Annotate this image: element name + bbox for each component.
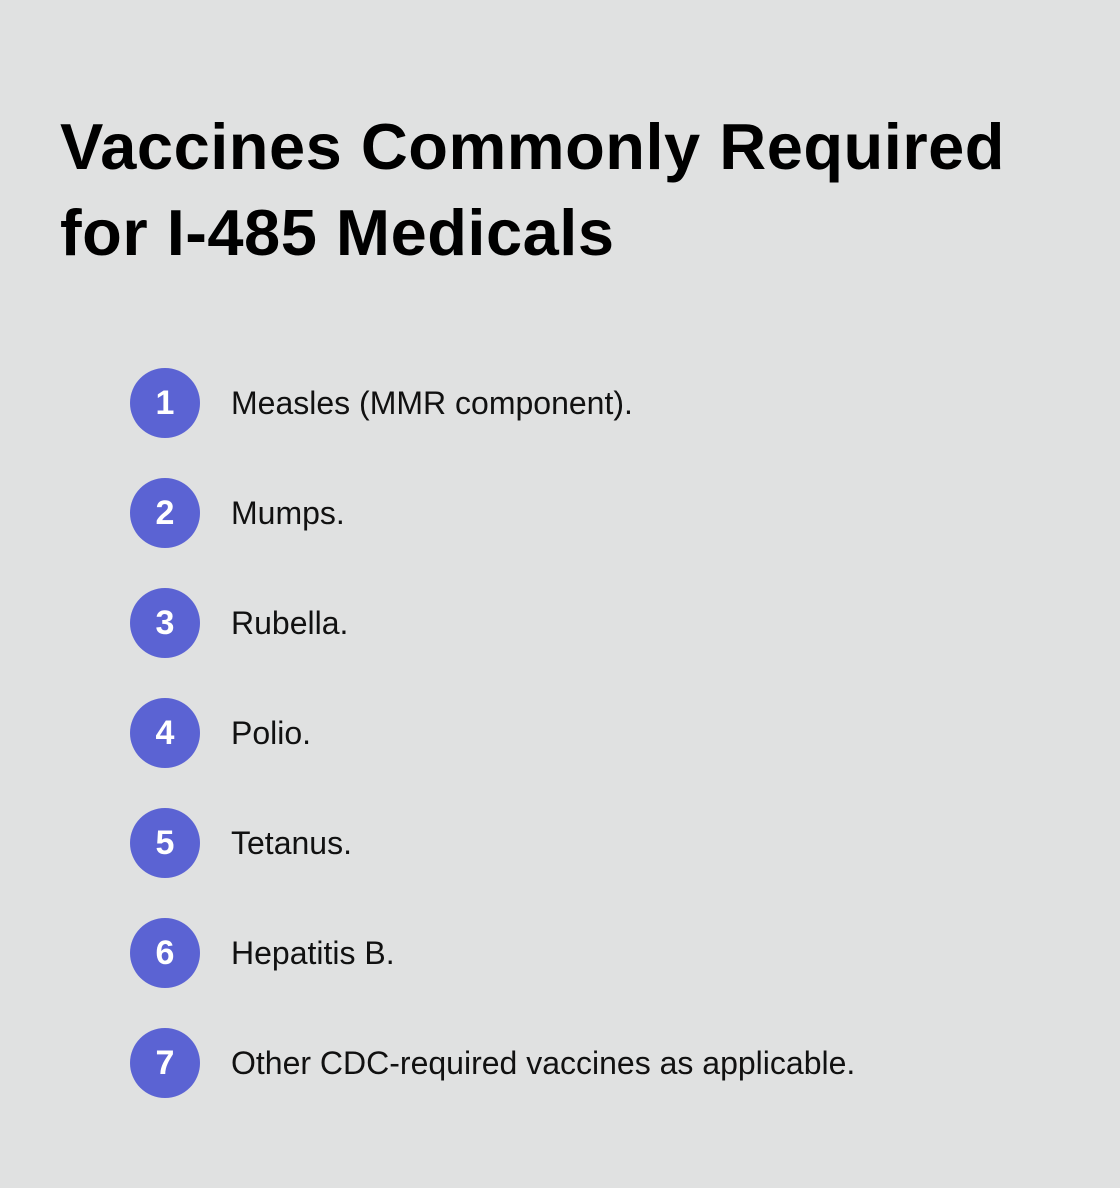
- item 1: 1: [156, 384, 174, 422]
- item 1: [130, 368, 633, 438]
- item 4: Polio.: [231, 715, 311, 751]
- item 3: Rubella.: [231, 605, 348, 641]
- item 6: 6: [156, 934, 174, 972]
- item 5: 5: [156, 824, 174, 862]
- item 7: 7: [156, 1044, 174, 1082]
- item 3: [130, 588, 348, 658]
- numbered vaccine list: [130, 368, 855, 1098]
- title: for I-485 Medicals: [60, 196, 614, 269]
- item 3: 3: [156, 604, 174, 642]
- title: Vaccines Commonly Required: [60, 110, 1005, 183]
- item 7: [130, 1028, 855, 1098]
- item 1: Measles (MMR component).: [231, 385, 633, 421]
- item 6: Hepatitis B.: [231, 935, 395, 971]
- item 5: Tetanus.: [231, 825, 352, 861]
- item 2: Mumps.: [231, 495, 345, 531]
- item 4: [130, 698, 311, 768]
- title: [60, 110, 1005, 269]
- item 6: [130, 918, 395, 988]
- item 2: [130, 478, 345, 548]
- item 2: 2: [156, 494, 174, 532]
- item 5: [130, 808, 352, 878]
- item 7: Other CDC-required vaccines as applicable.: [231, 1045, 855, 1081]
- item 4: 4: [156, 714, 174, 752]
